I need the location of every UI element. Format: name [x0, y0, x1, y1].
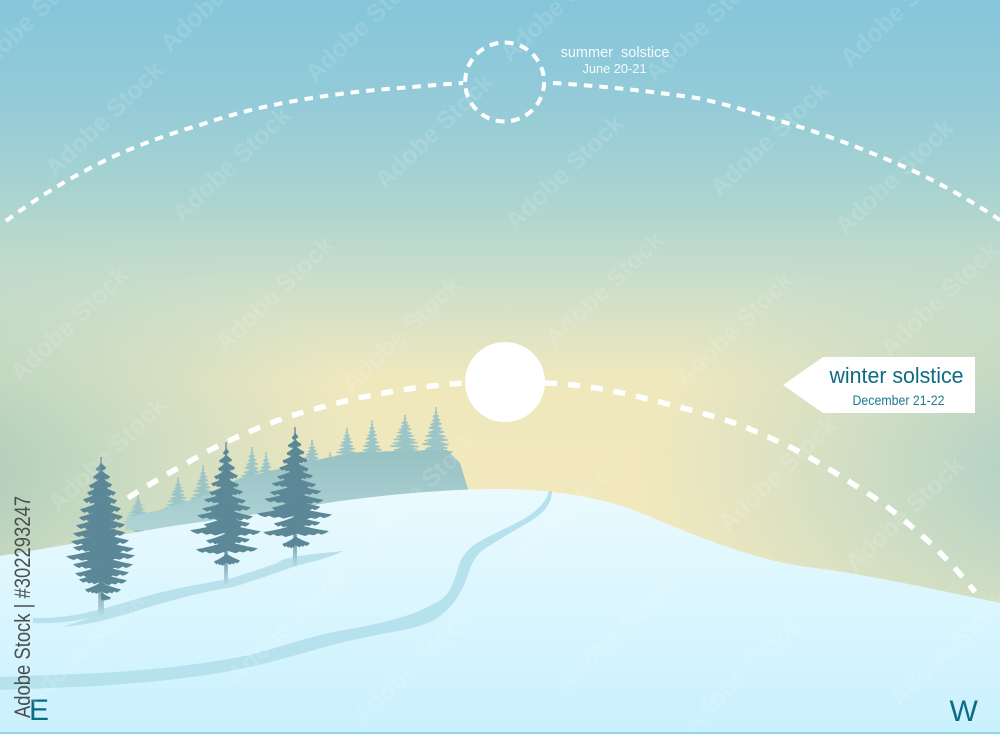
watermarks: Adobe Stock: [830, 114, 959, 240]
summer solstice label: summer solstice: [561, 45, 669, 61]
watermarks: Adobe Stock: [5, 261, 134, 387]
winter solstice label flag: winter solstice: [829, 363, 964, 388]
winter solstice label flag: [783, 357, 975, 413]
watermarks: Adobe Stock: [840, 451, 969, 577]
watermarks: Adobe Stock: [678, 611, 807, 734]
summer sun path: dashed arc: [6, 83, 1000, 221]
bottom edge line: [0, 732, 1000, 734]
watermarks: Adobe Stock: [337, 271, 466, 397]
summer solstice label: [561, 45, 669, 76]
watermarks: Adobe Stock: [540, 226, 669, 352]
east label: E: [29, 694, 49, 727]
watermarks: Adobe Stock: [167, 101, 296, 227]
watermarks: Adobe Stock: [508, 441, 637, 567]
summer solstice label: June 20-21: [582, 61, 646, 76]
ski track road: [0, 491, 552, 690]
pine tree 2: [190, 442, 261, 584]
pine tree 3: [257, 427, 332, 566]
stock id vertical text: Adobe Stock | #302293247: [10, 496, 35, 718]
watermarks: Adobe Stock: [40, 56, 169, 182]
watermarks: Adobe Stock: [370, 68, 499, 194]
winter solstice label flag: December 21-22: [852, 392, 945, 408]
watermarks: Adobe Stock: [670, 266, 799, 392]
watermarks: Adobe Stock: [20, 586, 149, 712]
watermarks: Adobe Stock: [210, 231, 339, 357]
sky left edge shading: [0, 190, 370, 734]
watermarks: Adobe Stock: [222, 563, 351, 689]
watermarks: Adobe Stock: [355, 426, 484, 552]
watermarks: Adobe Stock: [43, 391, 172, 517]
watermarks: Adobe Stock: [348, 604, 477, 730]
snowy hill: [0, 489, 1000, 734]
watermarks: Adobe Stock: [713, 411, 842, 537]
watermarks: Adobe Stock: [705, 76, 834, 202]
watermarks: Adobe Stock: [500, 109, 629, 235]
watermarks: Adobe Stock: [552, 571, 681, 697]
distant forest: [123, 407, 468, 538]
west label: W: [950, 695, 978, 728]
pine tree 1: [66, 457, 135, 615]
sky right edge shading: [640, 190, 1000, 734]
winter sun path: dashed arc: [128, 383, 975, 592]
winter sun position: white disc: [465, 342, 545, 422]
summer sun position: dashed circle: [465, 42, 544, 122]
tree shadows on snow: [33, 551, 343, 627]
